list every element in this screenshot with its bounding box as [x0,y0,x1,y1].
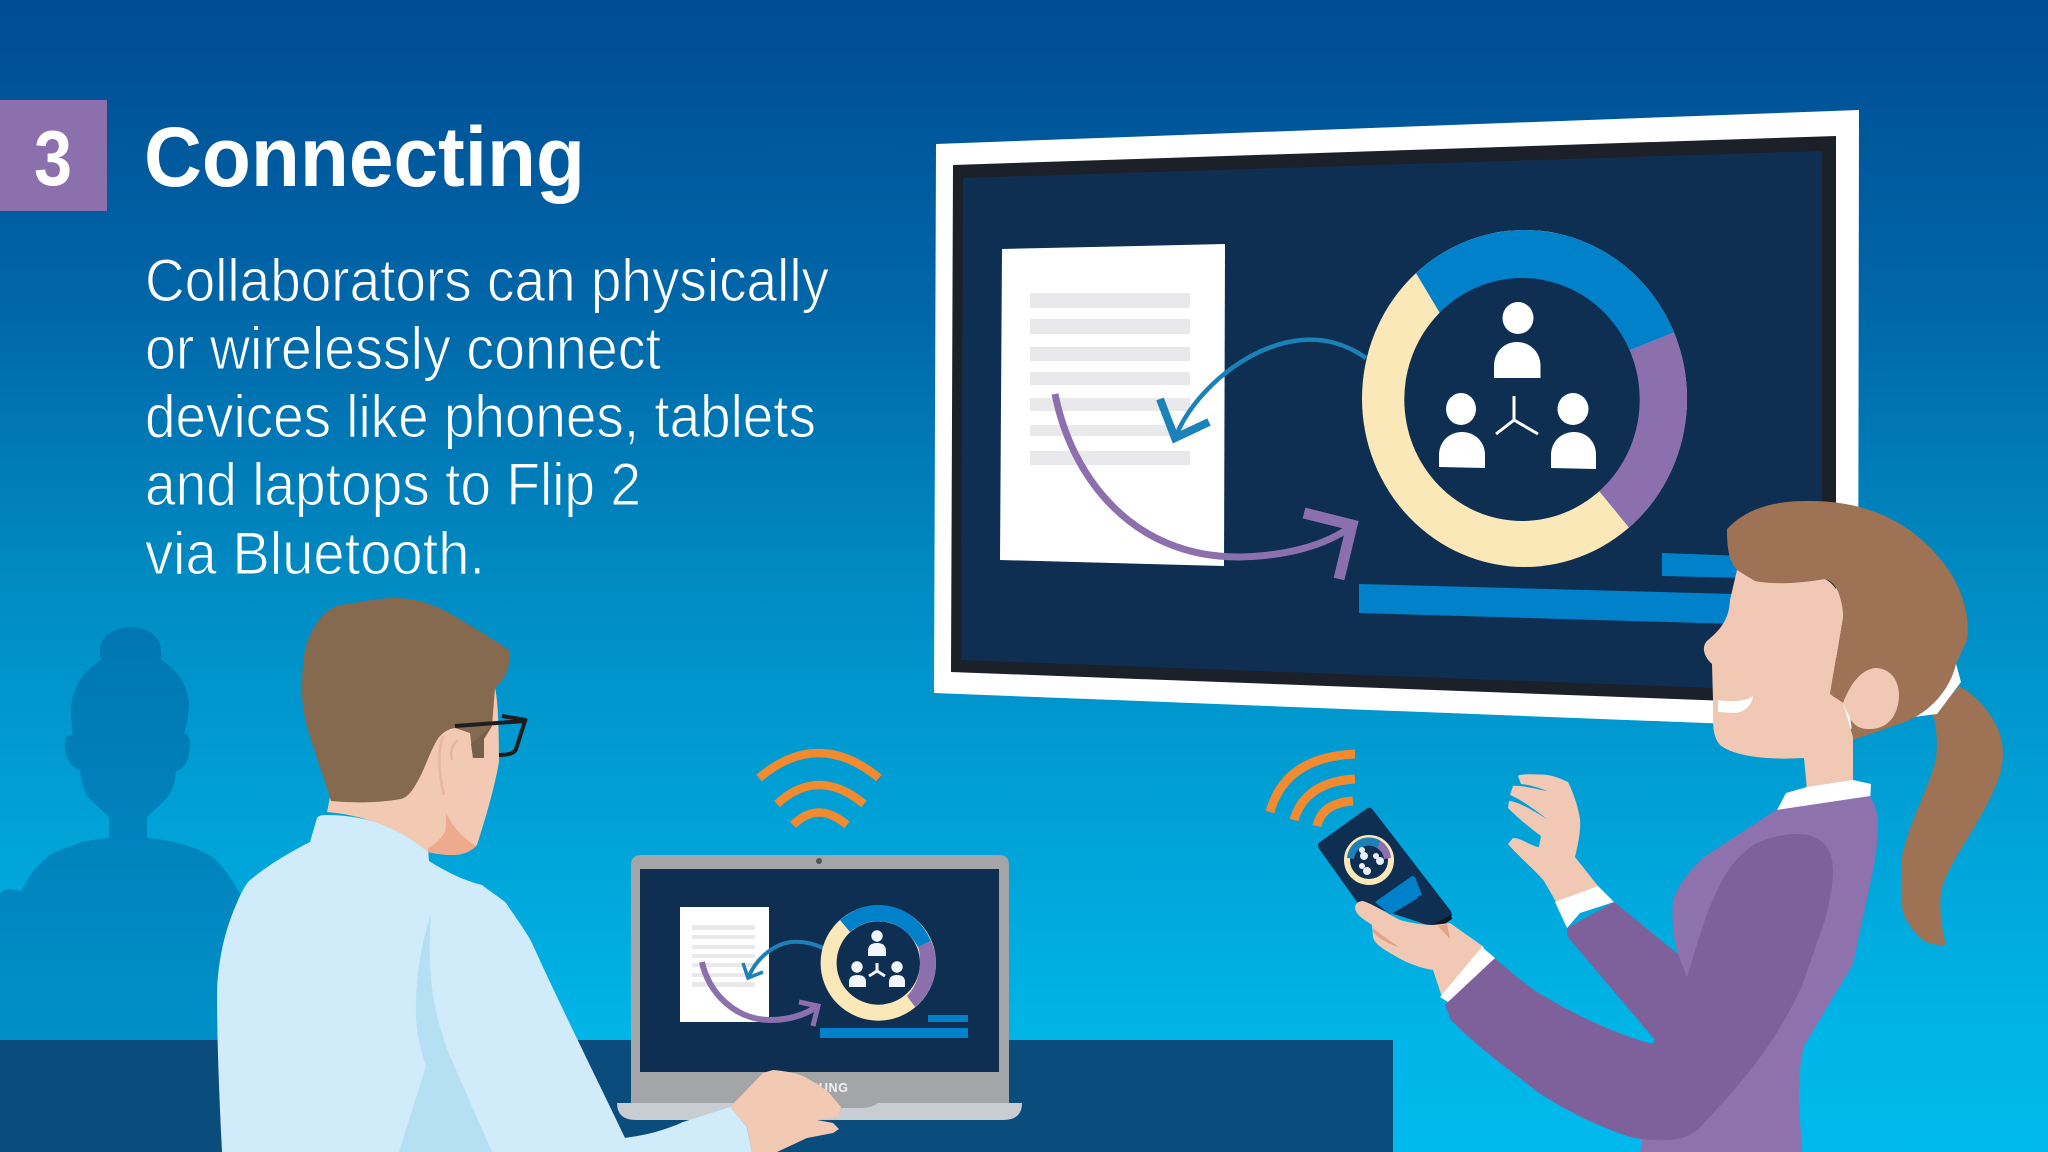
hand creases [1373,924,1450,947]
body text: and laptops to Flip 2 [145,451,641,518]
people icons [1439,302,1596,469]
woman jacket [1640,796,1878,1152]
samsung wordmark: SAMSUNG [780,1081,848,1095]
blue arrow [1160,340,1366,438]
raised cuff [1555,886,1614,928]
body text: via Bluetooth. [145,520,485,587]
man hair [302,598,510,802]
phone [1318,808,1452,929]
wall display [934,110,1859,729]
body text: or wirelessly connect [145,315,661,382]
phone cuff [1440,947,1495,1002]
phone icons [1359,847,1384,875]
laptop bars [820,1015,968,1038]
number badge: 3 [34,114,72,202]
phone bar [1375,876,1422,915]
donut chart [1362,230,1687,567]
body text: devices like phones, tablets [145,383,816,450]
wifi icon: phone [1270,754,1355,826]
document [1000,244,1225,566]
display bezel [951,136,1836,705]
smile [1718,696,1753,713]
laptop base [617,1103,1022,1120]
wifi icon: laptop [759,753,879,825]
neck shadow [428,813,476,855]
body text [145,247,829,587]
display screen [961,151,1822,692]
number badge [0,100,107,211]
laptop purple arrow [702,962,818,1026]
webcam [816,858,822,864]
sideburn [471,726,492,758]
laptop hinge [820,1103,878,1108]
laptop document [680,907,769,1022]
screen bars [1359,553,1745,624]
phone donut [1347,838,1391,882]
title: Connecting [144,110,585,204]
woman [1318,501,2003,1152]
woman face and neck [1704,570,1853,790]
laptop [617,855,1022,1120]
collar [1776,780,1871,812]
laptop donut chart [829,905,936,1013]
glasses [455,716,526,755]
man neck and face [327,688,499,855]
laptop people icons [849,930,905,987]
woman ear [1843,668,1899,729]
woman hair [1727,501,1968,740]
laptop screen [640,869,999,1072]
phone hand [1355,901,1484,997]
ponytail [1901,686,2003,945]
laptop lid [631,855,1009,1103]
shirt shadow [399,915,492,1152]
background person silhouette [0,627,240,1040]
man hand [730,1070,841,1152]
body text: Collaborators can physically [145,247,829,314]
table [0,1040,1393,1152]
man sleeve [560,1107,752,1152]
raised hand [1508,774,1598,902]
man [217,598,841,1152]
display frame [934,110,1859,729]
jacket sleeve [1445,834,1833,1140]
scrunchie [1914,660,1961,717]
purple arrow [1055,394,1352,579]
ear [439,736,458,795]
man shirt [217,815,640,1152]
laptop blue arrow [743,942,823,978]
